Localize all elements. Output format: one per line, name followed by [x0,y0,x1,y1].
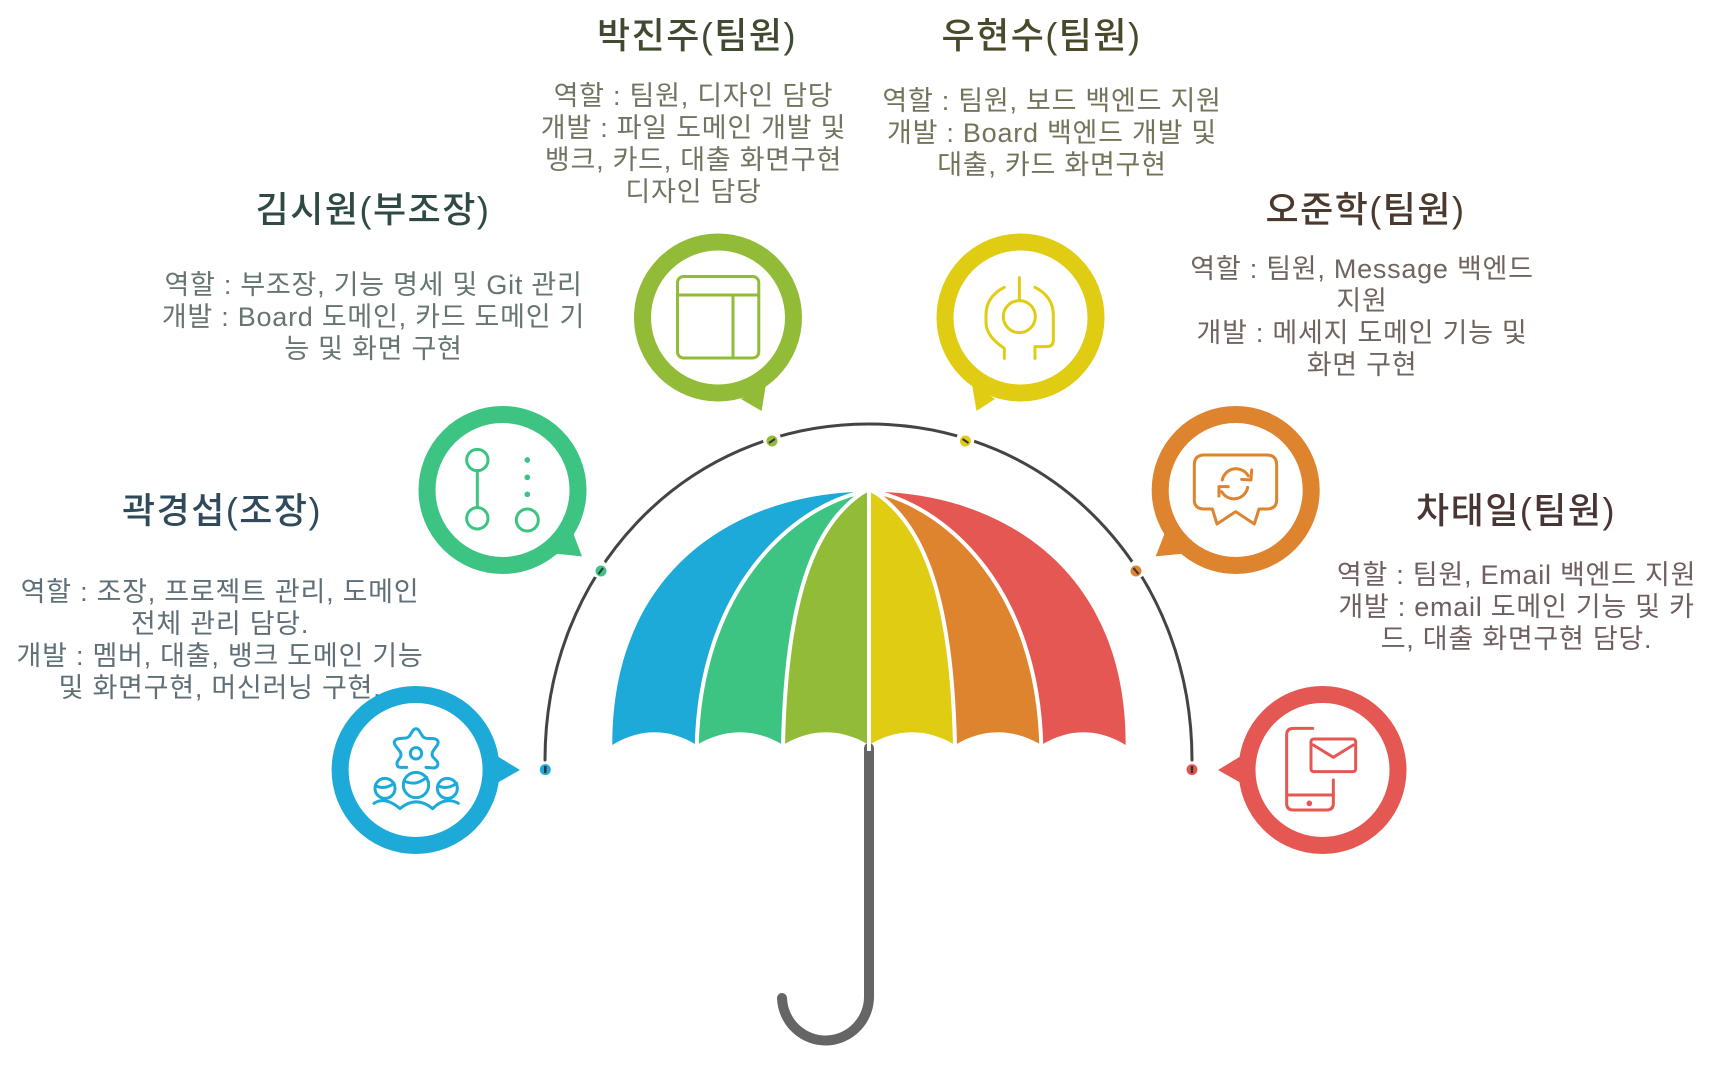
callout bubble [427,414,582,566]
connector dot [956,430,974,448]
callout bubble [642,242,794,411]
role text [162,270,585,364]
connector dot [1129,560,1147,578]
heading: 김시원(부조장) [256,189,490,230]
role text: 개발 : email 도메인 기능 및 카 [1338,592,1695,622]
role text: 역할 : 팀원, 보드 백엔드 지원 [882,86,1222,116]
role text: 개발 : 메세지 도메인 기능 및 [1196,318,1528,348]
role text: 지원 [1336,286,1388,316]
canopy panel: orange [876,493,1041,745]
role text: 대출, 카드 화면구현 [937,150,1167,180]
icon: team gear [374,729,458,809]
heading: 박진주(팀원) [597,15,797,56]
role text: 역할 : 부조장, 기능 명세 및 Git 관리 [164,270,583,300]
canopy panel: red [880,492,1126,745]
connector dot [540,764,551,775]
role text [17,577,423,703]
member: 오준학 [1129,189,1534,578]
role text [541,81,846,207]
umbrella handle [782,748,869,1040]
member: 차태일 [1186,490,1696,846]
role text: 개발 : 멤버, 대출, 뱅크 도메인 기능 [17,641,423,671]
role text: 역할 : 팀원, 디자인 담당 [554,81,833,111]
role text: 능 및 화면 구현 [284,334,463,364]
role text: 화면 구현 [1307,350,1417,380]
icon: robot head [986,278,1053,358]
role text: 디자인 담당 [625,177,762,207]
role text: 개발 : 파일 도메인 개발 및 [541,113,846,143]
callout bubble [945,242,1096,411]
connector dot [589,560,607,578]
callout bubble [1156,414,1311,566]
canopy panel: lime [783,491,869,745]
role text: 역할 : 팀원, Email 백엔드 지원 [1337,560,1696,590]
arc above umbrella [545,424,1192,760]
canopy panel: yellow [869,491,955,745]
callout bubble [340,694,520,846]
role text: 개발 : Board 도메인, 카드 도메인 기 [162,302,585,332]
icon: chat sync [1194,455,1277,524]
role text: 역할 : 조장, 프로젝트 관리, 도메인 [21,577,419,607]
role text [1190,254,1534,380]
role text [882,86,1222,180]
callout bubble [1218,694,1398,846]
role text: 전체 관리 담당. [131,609,309,639]
umbrella [612,487,1126,1040]
role text: 뱅크, 카드, 대출 화면구현 [545,145,842,175]
canopy panel: blue [612,492,858,745]
heading: 곽경섭(조장) [122,490,322,531]
heading: 오준학(팀원) [1265,189,1466,230]
member: 우현수 [882,15,1222,448]
member: 박진주 [541,15,846,448]
heading: 우현수(팀원) [941,15,1142,56]
icon: layout window [678,276,759,358]
connector dot [1186,764,1198,775]
role text [1337,560,1696,654]
icon: git branch [467,449,538,531]
member: 곽경섭 [17,490,551,846]
role text: 개발 : Board 백엔드 개발 및 [887,118,1217,148]
role text: 역할 : 팀원, Message 백엔드 [1190,254,1534,284]
role text: 드, 대출 화면구현 담당. [1381,624,1652,654]
heading: 차태일(팀원) [1416,490,1616,531]
connector dot [763,430,781,448]
member: 김시원 [162,189,607,578]
icon: phone and mail [1287,728,1356,810]
canopy panel: green [697,493,862,745]
role text: 및 화면구현, 머신러닝 구현. [59,673,381,703]
